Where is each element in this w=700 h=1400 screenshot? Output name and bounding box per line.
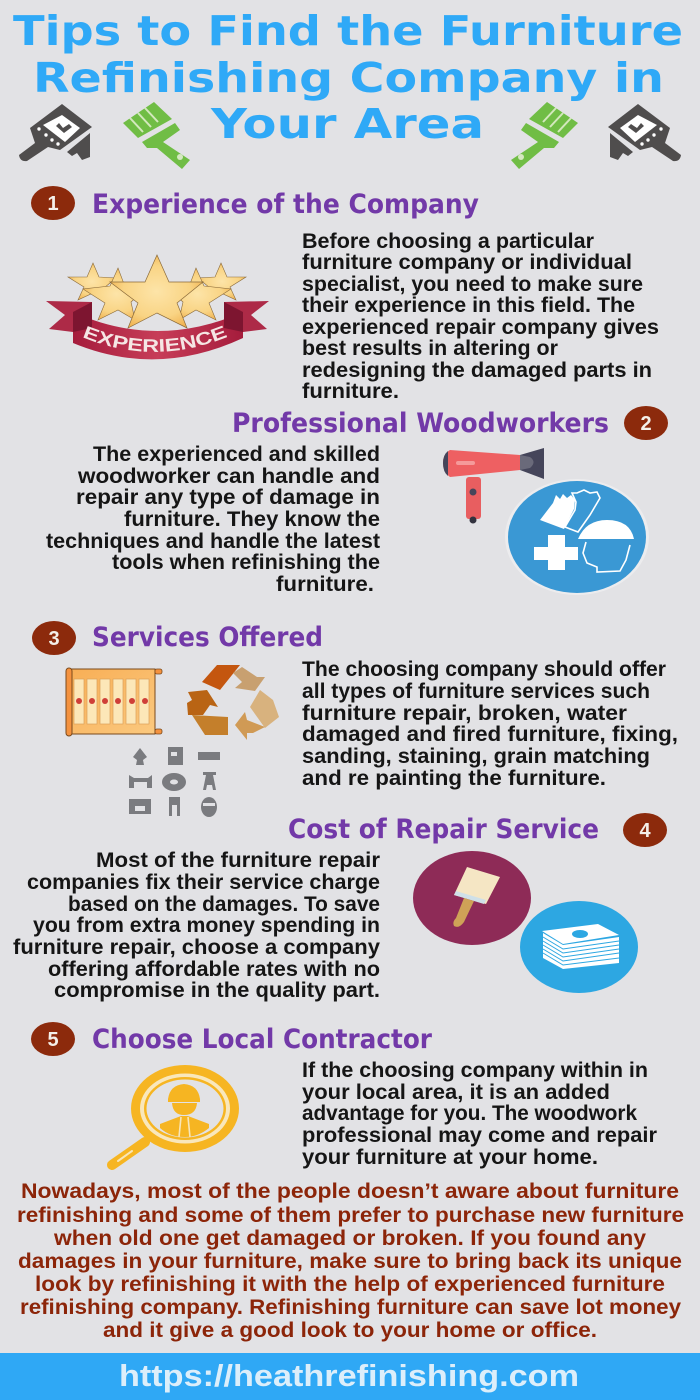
text block 4: you from extra money spending in bbox=[33, 914, 380, 937]
number badge 3 bbox=[32, 621, 76, 655]
panel: choose local contractor bbox=[31, 1022, 657, 1169]
closing paragraph: Nowadays, most of the people doesn’t aware about furniture bbox=[21, 1180, 679, 1203]
panel: professional woodworkers bbox=[46, 406, 668, 596]
closing paragraph: look by refinishing it with the help of experienced furniture bbox=[35, 1273, 665, 1296]
icon: wooden recycle symbol bbox=[187, 665, 279, 740]
icon: paint brush on maroon circle bbox=[413, 851, 531, 945]
text block 2: techniques and handle the latest bbox=[46, 530, 380, 553]
number badge 5: 5 bbox=[47, 1029, 59, 1051]
text block 4 bbox=[13, 849, 380, 1002]
closing paragraph: when old one get damaged or broken. If you found any bbox=[53, 1227, 646, 1250]
icon: grey paint brush right bbox=[608, 104, 681, 161]
text block 4: compromise in the quality part. bbox=[54, 979, 380, 1002]
heading 1: Experience of the Company bbox=[92, 189, 479, 220]
icon: radiator panel bbox=[66, 668, 162, 736]
text block 1: Before choosing a particular bbox=[302, 230, 594, 253]
closing paragraph: refinishing and some of them prefer to purchase new furniture bbox=[17, 1204, 684, 1227]
panel: experience of the company bbox=[31, 186, 659, 403]
closing paragraph bbox=[17, 1180, 684, 1342]
text block 1: specialist, you need to make sure bbox=[302, 273, 643, 296]
text block 2: furniture. They know the bbox=[124, 508, 380, 531]
text block 1: furniture company or individual bbox=[302, 251, 632, 274]
number badge 2: 2 bbox=[640, 413, 652, 435]
text block 4: Most of the furniture repair bbox=[96, 849, 380, 872]
icon: safety gear circle bbox=[505, 479, 649, 595]
heading 5: Choose Local Contractor bbox=[92, 1024, 433, 1055]
panel: cost of repair service bbox=[13, 813, 667, 1002]
number badge 3: 3 bbox=[48, 628, 60, 650]
text block 1: furniture. bbox=[302, 380, 399, 403]
icon: grey paint brush left bbox=[19, 104, 92, 161]
text block 4: furniture repair, choose a company bbox=[13, 936, 380, 959]
text block 3: and re painting the furniture. bbox=[302, 767, 606, 790]
icon: hair dryer bbox=[443, 448, 544, 524]
text block 2: The experienced and skilled bbox=[93, 443, 380, 466]
icon: stack of money on blue circle bbox=[520, 901, 638, 993]
text block 3: damaged and fired furniture, fixing, bbox=[302, 723, 678, 746]
text block 5: your local area, it is an added bbox=[302, 1081, 610, 1104]
text block 5: your furniture at your home. bbox=[302, 1146, 598, 1169]
number badge 2 bbox=[624, 406, 668, 440]
text block 3 bbox=[302, 658, 678, 790]
title: Your Area bbox=[210, 100, 484, 148]
heading 4: Cost of Repair Service bbox=[288, 814, 599, 845]
text block 2: repair any type of damage in bbox=[76, 486, 380, 509]
text block 2 bbox=[46, 443, 380, 596]
text block 5: If the choosing company within in bbox=[302, 1059, 648, 1082]
icon: magnifier with contractor bbox=[112, 1065, 239, 1165]
text block 4: based on the damages. To save bbox=[68, 893, 380, 916]
text block 5: professional may come and repair bbox=[302, 1124, 657, 1147]
footer bar with url: https://heathrefinishing.com bbox=[119, 1358, 579, 1393]
text block 2: woodworker can handle and bbox=[77, 465, 380, 488]
text block 1: experienced repair company gives bbox=[302, 316, 659, 339]
number badge 5 bbox=[31, 1022, 75, 1056]
text block 5 bbox=[302, 1059, 657, 1169]
number badge 1: 1 bbox=[47, 193, 59, 215]
icon: experience stars and ribbon bbox=[46, 254, 269, 360]
text block 1: their experience in this field. The bbox=[302, 294, 635, 317]
text block 3: all types of furniture services such bbox=[302, 680, 650, 703]
footer bar with url bbox=[0, 1353, 700, 1400]
number badge 4: 4 bbox=[639, 820, 651, 842]
text block 4: companies fix their service charge bbox=[27, 871, 380, 894]
icon: green paint brush right bbox=[511, 102, 578, 169]
number badge 1 bbox=[31, 186, 75, 220]
number badge 4 bbox=[623, 813, 667, 847]
icon: green paint brush left bbox=[123, 102, 190, 169]
text block 3: sanding, staining, grain matching bbox=[302, 745, 650, 768]
icon: experience stars and ribbon: EXPERIENCE bbox=[84, 326, 227, 352]
text block 1 bbox=[302, 230, 659, 403]
title bbox=[13, 7, 683, 148]
closing paragraph: refinishing company. Refinishing furniture can save lot money bbox=[20, 1296, 681, 1319]
text block 5: advantage for you. The woodwork bbox=[302, 1102, 637, 1125]
closing paragraph: and it give a good look to your home or office. bbox=[103, 1319, 597, 1342]
icon: small furniture grid bbox=[129, 747, 220, 817]
heading 3: Services Offered bbox=[92, 622, 323, 653]
text block 1: best results in altering or bbox=[302, 337, 558, 360]
text block 1: redesigning the damaged parts in bbox=[302, 359, 652, 382]
panel: services offered bbox=[32, 621, 678, 817]
title: Tips to Find the Furniture bbox=[13, 7, 683, 55]
text block 2: tools when refinishing the bbox=[112, 551, 380, 574]
heading 2: Professional Woodworkers bbox=[232, 408, 609, 439]
text block 2: furniture. bbox=[276, 573, 374, 596]
title: Refinishing Company in bbox=[33, 54, 664, 102]
text block 4: offering affordable rates with no bbox=[48, 958, 380, 981]
text block 3: furniture repair, broken, water bbox=[302, 702, 627, 725]
text block 3: The choosing company should offer bbox=[302, 658, 666, 681]
closing paragraph: damages in your furniture, make sure to bring back its unique bbox=[18, 1250, 682, 1273]
